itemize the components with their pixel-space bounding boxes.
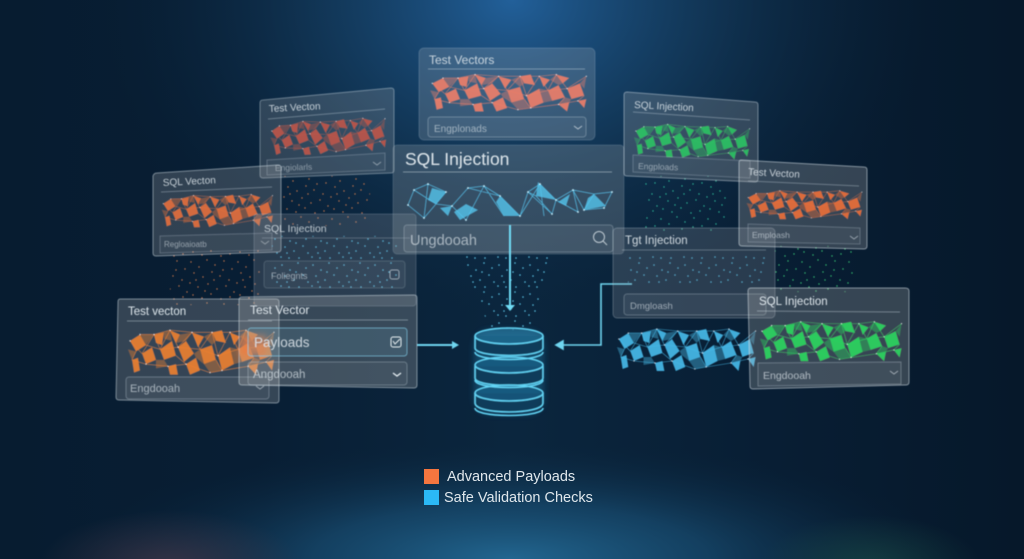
- panel: centre SQL injection: [393, 145, 624, 254]
- heading: SQL Injection: [759, 296, 828, 308]
- field: payloads with checkbox: [248, 328, 407, 356]
- particles: orange stream under SQL vector panel: [170, 250, 260, 305]
- highlight: orange glow at edge: [240, 336, 266, 356]
- particles: blue: [272, 236, 397, 288]
- dropdown field: Engdooah: [130, 383, 180, 395]
- particles: blue funnel into database: [462, 255, 552, 330]
- mesh: blue outside panels: [617, 329, 756, 371]
- panel: mid left SQL injection: [254, 214, 416, 306]
- heading: Test Vectors: [429, 53, 494, 67]
- mesh: green: [760, 322, 902, 361]
- mesh: green: [633, 123, 750, 160]
- legend swatch: advanced payloads: [424, 469, 439, 484]
- dropdown field: Engplonads: [434, 124, 487, 135]
- checkbox field: [264, 261, 405, 288]
- search field: [404, 225, 613, 252]
- dropdown field: Regloaioatb: [164, 240, 207, 249]
- heading: Test Vector: [250, 303, 309, 317]
- arrow: right panels to database: [556, 284, 632, 349]
- mesh: orange: [162, 194, 273, 228]
- mesh: red: [270, 117, 387, 157]
- search field: Ungdooah: [410, 233, 477, 249]
- database cylinder: [474, 328, 544, 416]
- dropdown field: [624, 294, 766, 315]
- heading: SQL Vecton: [163, 175, 216, 189]
- dropdown field: Engiolarls: [275, 162, 312, 173]
- panel: upper left test vector: [260, 88, 394, 178]
- dropdown field: Dmgloash: [630, 301, 673, 312]
- heading: SQL Injection: [634, 100, 694, 114]
- arrow: down to database: [505, 225, 515, 311]
- mesh: orange: [747, 191, 862, 219]
- heading: Test Vecton: [748, 167, 800, 181]
- particles: orange stream under test vector panel: [283, 176, 370, 226]
- panel: bottom left-centre test vector: [239, 295, 417, 388]
- mesh: salmon: [430, 75, 586, 111]
- dropdown field: Angdooah: [253, 369, 305, 381]
- mesh: orange: [128, 330, 274, 375]
- dropdown field: [428, 117, 586, 137]
- particles: blue: [628, 255, 765, 285]
- legend label: safe validation checks: Safe Validation Checks: [444, 490, 593, 506]
- dropdown field: [248, 362, 407, 385]
- particles: green stream under upper right panel: [645, 176, 727, 232]
- heading: Tgt Injection: [625, 235, 688, 247]
- heading: SQL Injection: [264, 223, 327, 235]
- panel: bottom right SQL injection: [748, 288, 909, 389]
- dropdown field: Engploads: [638, 161, 678, 172]
- mesh: blue: [408, 182, 612, 220]
- legend swatch: safe validation checks: [424, 490, 439, 505]
- legend: [424, 469, 593, 506]
- panel: upper right SQL injection: [624, 92, 758, 182]
- field: payloads with checkbox: Payloads: [254, 335, 310, 350]
- database glow: [474, 330, 544, 414]
- legend label: advanced payloads: Advanced Payloads: [447, 469, 575, 485]
- dropdown field: [758, 362, 901, 386]
- panel: mid right test injection: [613, 228, 775, 318]
- heading: Test vecton: [128, 306, 186, 318]
- particles: green stream under right panel: [775, 246, 853, 292]
- heading: Test Vecton: [269, 101, 321, 115]
- dropdown field: Engdooah: [763, 370, 811, 382]
- panel: bottom left test vector: [116, 299, 279, 403]
- panel: top centre test vectors: [419, 48, 595, 140]
- dropdown field: Emploash: [752, 230, 790, 240]
- panel: left SQL vector: [153, 165, 281, 256]
- panel: right test vector: [739, 160, 867, 249]
- dropdown field: [126, 377, 269, 399]
- arrow: left panels to database: [417, 341, 459, 349]
- heading: SQL Injection: [405, 149, 509, 169]
- checkbox field: Foliegnts: [271, 271, 308, 281]
